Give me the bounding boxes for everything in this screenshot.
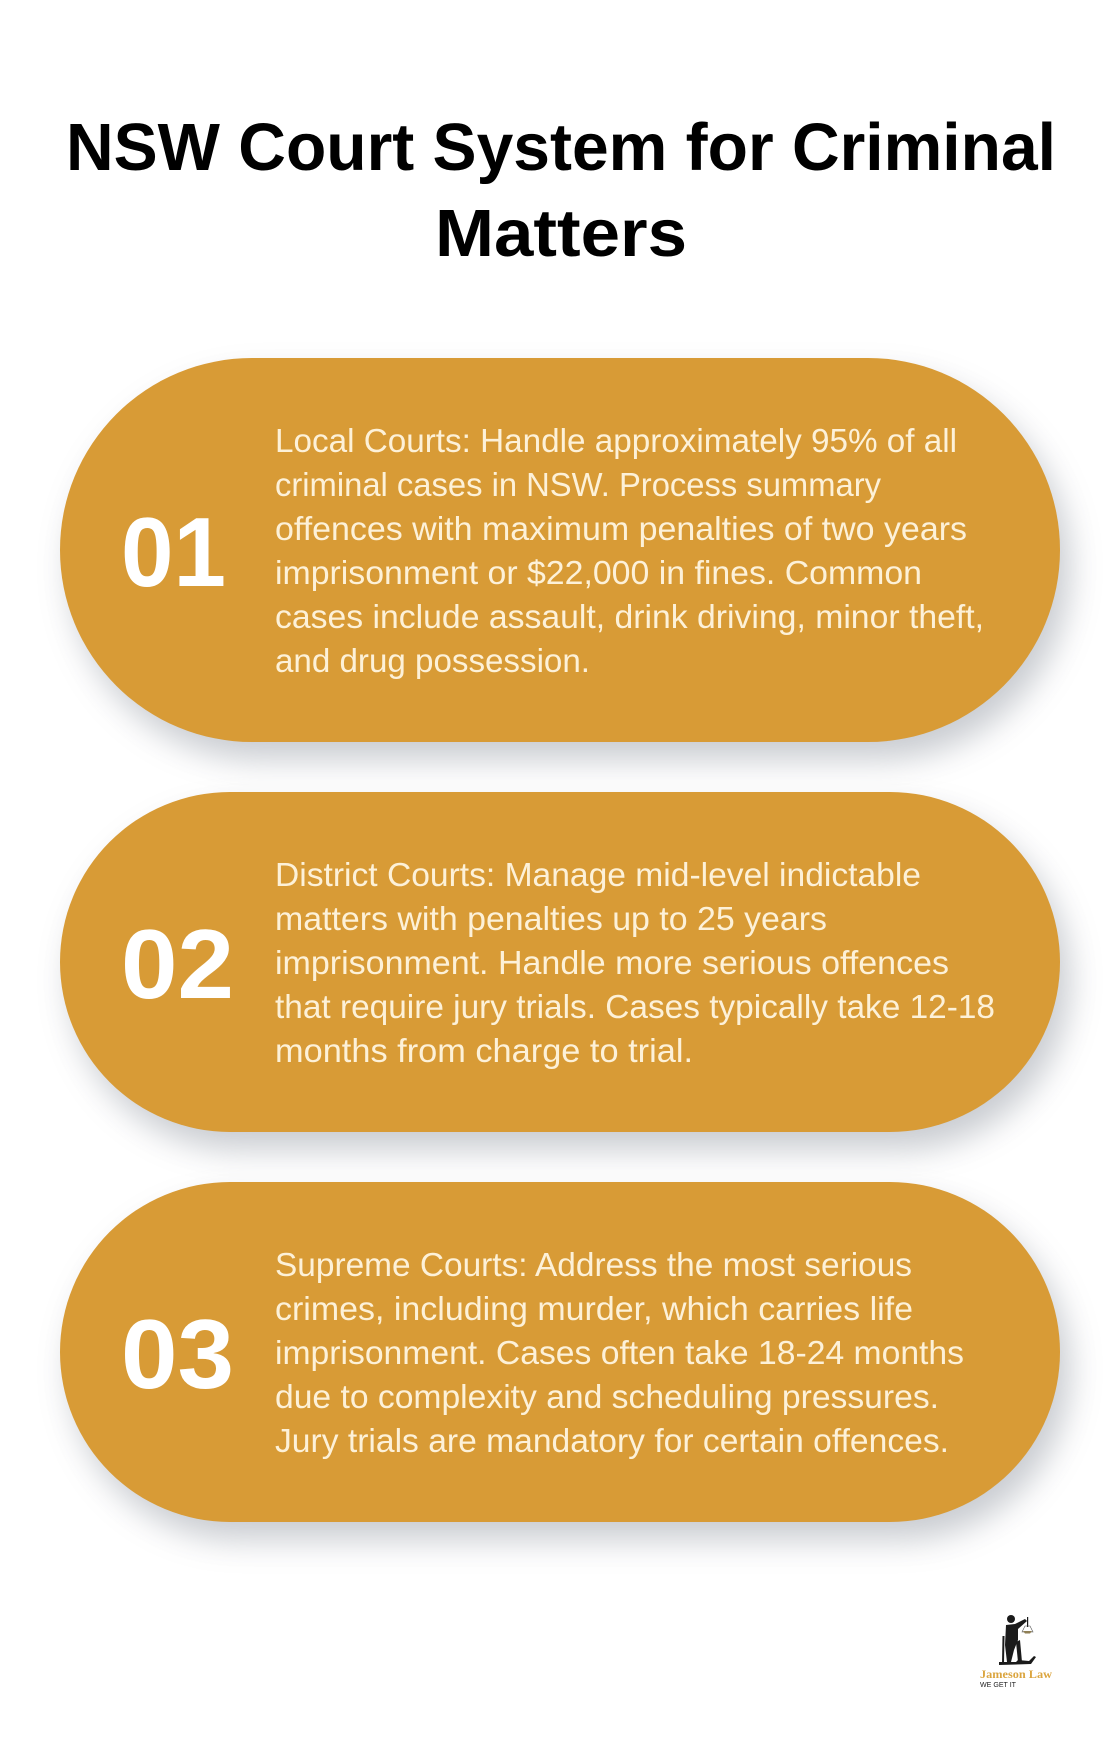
text: Local Courts description: and drug possession. bbox=[275, 643, 590, 680]
logo tagline: WE GET IT bbox=[980, 1680, 1016, 1689]
text: District Courts description: District Courts: Manage mid-level indictable bbox=[275, 857, 921, 894]
title bbox=[66, 110, 1056, 271]
number 01: 01 bbox=[121, 497, 226, 607]
text: Local Courts description: cases include assault, drink driving, minor theft, bbox=[275, 599, 984, 636]
text: District Courts description: matters with penalties up to 25 years bbox=[275, 901, 827, 938]
text: District Courts description: months from charge to trial. bbox=[275, 1033, 693, 1070]
number 02: 02 bbox=[121, 909, 234, 1019]
text: Local Courts description: criminal cases in NSW. Process summary bbox=[275, 467, 881, 504]
text: District Courts description: imprisonment. Handle more serious offences bbox=[275, 945, 949, 982]
text: Local Courts description: imprisonment or $22,000 in fines. Common bbox=[275, 555, 922, 592]
number 03: 03 bbox=[121, 1299, 234, 1409]
text: Supreme Courts description: Jury trials are mandatory for certain offences. bbox=[275, 1423, 949, 1460]
panel: Local Courts bbox=[60, 358, 1070, 760]
panel: District Courts bbox=[60, 792, 1070, 1150]
title: Matters bbox=[435, 196, 687, 271]
text: Supreme Courts description: imprisonment. Cases often take 18-24 months bbox=[275, 1335, 964, 1372]
panel: Supreme Courts bbox=[60, 1182, 1070, 1540]
logo name: Jameson Law bbox=[980, 1669, 1053, 1681]
text: Supreme Courts description bbox=[275, 1247, 964, 1460]
icon: lady justice bbox=[999, 1615, 1036, 1665]
text: District Courts description: that require jury trials. Cases typically take 12-18 bbox=[275, 989, 995, 1026]
logo: Jameson Law bbox=[980, 1615, 1053, 1689]
text: District Courts description bbox=[275, 857, 995, 1070]
text: Supreme Courts description: due to complexity and scheduling pressures. bbox=[275, 1379, 939, 1416]
title: NSW Court System for Criminal bbox=[66, 110, 1056, 185]
text: Supreme Courts description: crimes, including murder, which carries life bbox=[275, 1291, 913, 1328]
text: Local Courts description bbox=[275, 423, 984, 680]
text: Local Courts description: Local Courts: Handle approximately 95% of all bbox=[275, 423, 957, 460]
text: Supreme Courts description: Supreme Courts: Address the most serious bbox=[275, 1247, 912, 1284]
text: Local Courts description: offences with maximum penalties of two years bbox=[275, 511, 967, 548]
